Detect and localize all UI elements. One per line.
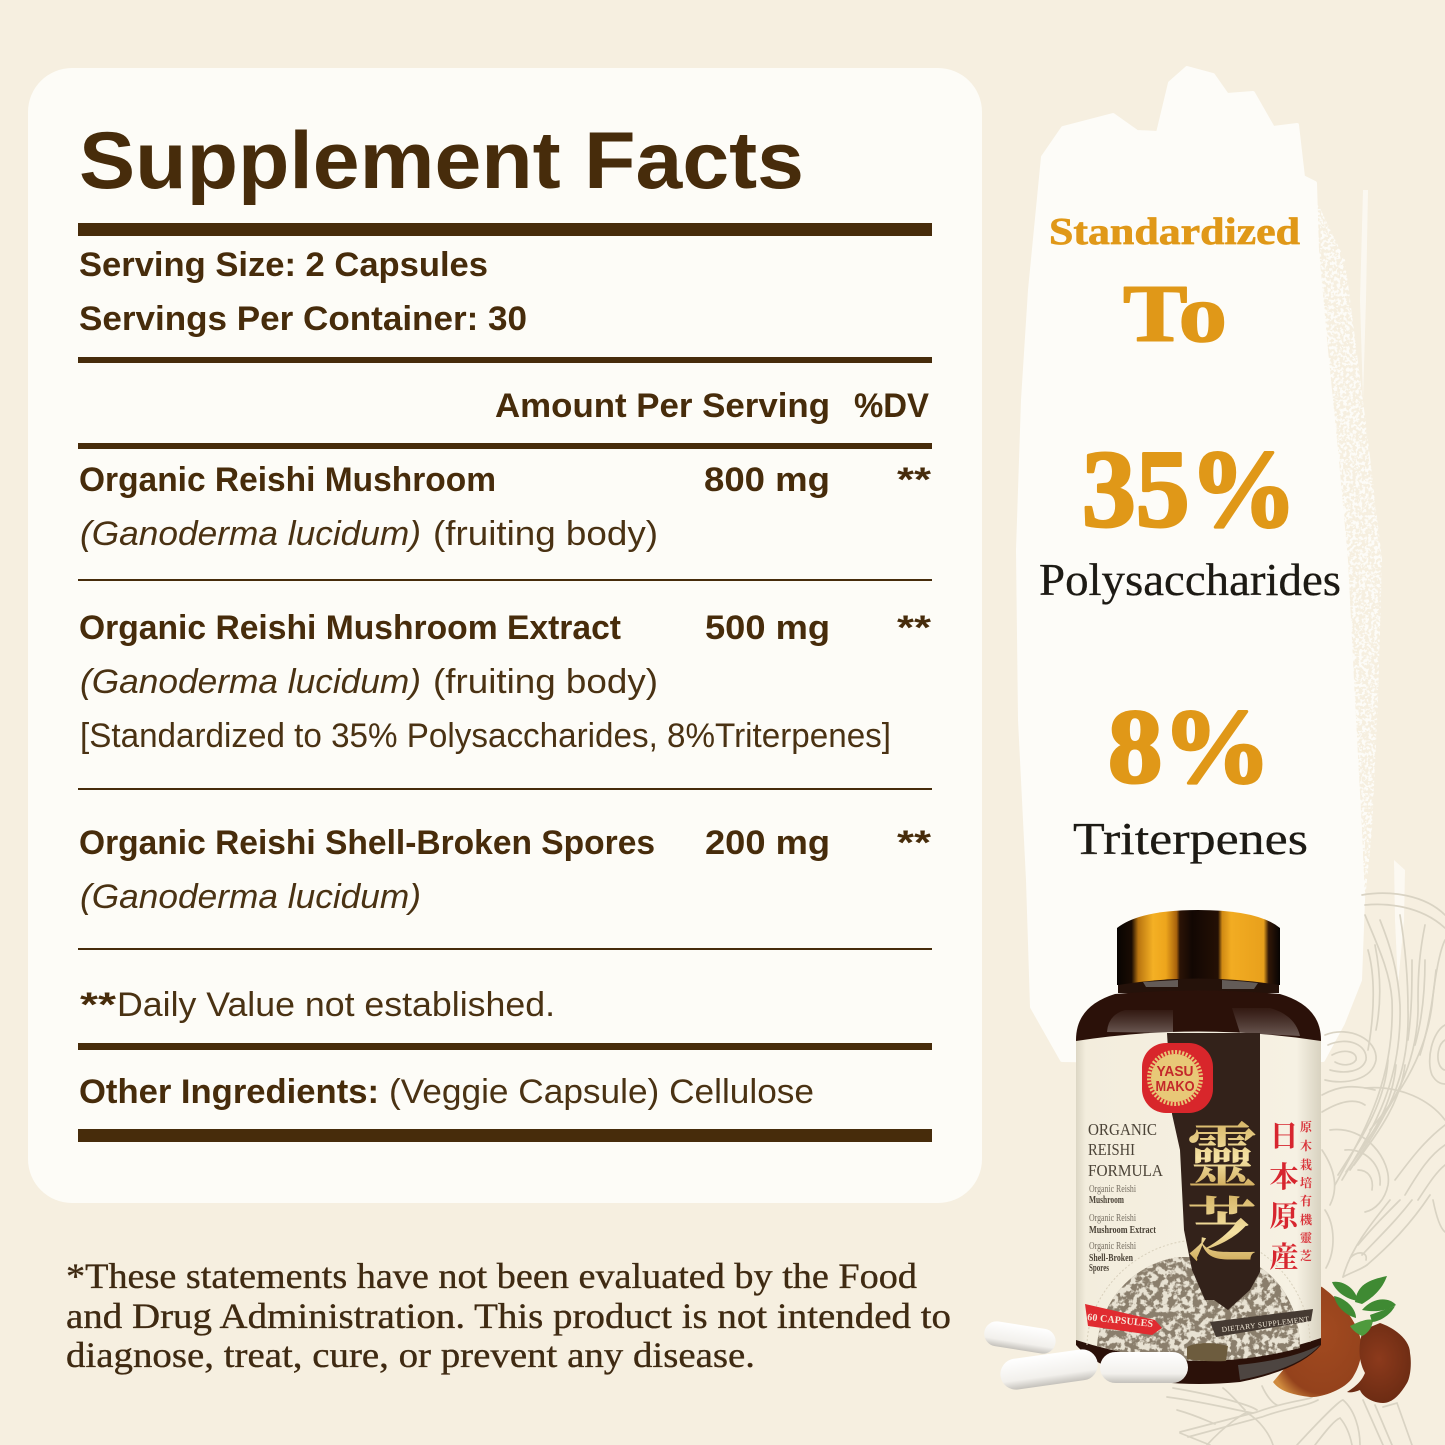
logo: YASU: [1156, 1063, 1194, 1080]
daily value note: **: [80, 986, 117, 1024]
label ingredient list: Spores: [1089, 1263, 1109, 1274]
leaf: [1332, 1276, 1396, 1336]
ingredient row 2: (Ganoderma lucidum): [80, 663, 421, 701]
daily value note: Daily Value not established.: [117, 986, 555, 1024]
capsule back: [982, 1320, 1057, 1355]
FDA disclaimer: *These statements have not been evaluated by the Food: [66, 1256, 917, 1296]
bottle shoulder highlights: [1107, 1008, 1320, 1380]
ingredient row 2: [Standardized to 35% Polysaccharides, 8%Triterpenes]: [80, 717, 891, 755]
capsule right: [1100, 1352, 1188, 1383]
stat: 35% polysaccharides: 35%: [1082, 428, 1297, 550]
logo: [1142, 1043, 1213, 1113]
label product name: [1088, 1120, 1164, 1180]
ingredient row 2: **: [897, 609, 932, 647]
capsules: [982, 1320, 1188, 1392]
capsule left: [998, 1347, 1100, 1392]
other ingredients: [79, 1073, 814, 1111]
stat: 35% polysaccharides: Polysaccharides: [1039, 554, 1341, 605]
reishi mushrooms and leaf: [1273, 1276, 1411, 1403]
label mushroom artwork: [1097, 1257, 1300, 1361]
red vertical text: [1300, 1119, 1313, 1263]
60 capsules tag: 60 CAPSULES: [1087, 1312, 1154, 1330]
gold reishi characters: 靈: [1187, 1120, 1257, 1197]
red vertical text: 有: [1300, 1193, 1312, 1208]
ingredient row 1: [79, 461, 932, 553]
label product name: FORMULA: [1088, 1161, 1164, 1180]
red vertical text: 培: [1300, 1175, 1312, 1190]
red vertical text: 芝: [1300, 1248, 1312, 1263]
ingredient row 2: 500 mg: [705, 609, 830, 647]
red vertical text: 機: [1300, 1212, 1313, 1227]
red japanese origin text: 本: [1269, 1161, 1299, 1194]
gold reishi characters: 芝: [1187, 1194, 1257, 1271]
ingredient row 3: **: [897, 824, 932, 862]
red vertical text: 靈: [1300, 1230, 1312, 1245]
ingredient row 2: (fruiting body): [433, 663, 658, 701]
label ingredient list: Mushroom Extract: [1089, 1225, 1157, 1236]
red vertical text: 原: [1300, 1119, 1313, 1134]
red japanese origin text: [1269, 1121, 1300, 1274]
label ingredient list: Organic Reishi: [1089, 1184, 1136, 1195]
60 capsules tag: [1085, 1304, 1162, 1335]
FDA disclaimer: diagnose, treat, cure, or prevent any disease.: [66, 1335, 755, 1375]
other ingredients: Other Ingredients:: [79, 1073, 379, 1111]
logo: MAKO: [1156, 1078, 1195, 1095]
gold reishi characters: [1187, 1120, 1257, 1271]
red japanese origin text: 日: [1269, 1121, 1299, 1153]
serving info: Servings Per Container: 30: [79, 300, 527, 338]
mushroom line art background: [1167, 893, 1445, 1445]
brush stroke panel: [1018, 68, 1405, 1062]
ingredient row 3: 200 mg: [705, 824, 830, 862]
serving info: Serving Size: 2 Capsules: [79, 246, 488, 284]
ingredient row 1: Organic Reishi Mushroom: [79, 461, 496, 499]
standardized heading: Standardized: [1049, 211, 1300, 253]
red vertical text: 栽: [1300, 1157, 1312, 1172]
ingredient row 1: 800 mg: [704, 461, 830, 499]
label dark brush strip: [1167, 1033, 1260, 1310]
bottle label: [1076, 1032, 1321, 1361]
product bottle: [1076, 910, 1321, 1384]
table header: %DV: [854, 387, 929, 425]
label ingredient list: Mushroom: [1089, 1195, 1124, 1206]
ingredient row 2: [79, 609, 932, 755]
ingredient row 2: Organic Reishi Mushroom Extract: [79, 609, 621, 647]
red vertical text: 木: [1300, 1138, 1312, 1153]
label product name: ORGANIC: [1088, 1120, 1157, 1139]
table header: Amount Per Serving: [495, 387, 830, 425]
bottle body: [1076, 990, 1321, 1384]
stat: 8% triterpenes: 8%: [1108, 688, 1271, 805]
ingredient row 3: Organic Reishi Shell-Broken Spores: [79, 824, 655, 862]
label product name: REISHI: [1088, 1140, 1135, 1159]
ingredient row 3: (Ganoderma lucidum): [80, 878, 421, 916]
ingredient row 1: (Ganoderma lucidum): [80, 515, 421, 553]
ingredient row 3: [79, 824, 932, 916]
ingredient row 1: **: [897, 461, 932, 499]
supplement facts card: [28, 68, 982, 1203]
stat: 8% triterpenes: Triterpenes: [1073, 813, 1308, 864]
stat: 35% polysaccharides: [1039, 428, 1341, 605]
label rings: [1087, 1238, 1310, 1345]
label ingredient list: Shell-Broken: [1089, 1253, 1133, 1264]
title: Supplement Facts: [79, 116, 804, 206]
other ingredients: (Veggie Capsule) Cellulose: [389, 1073, 814, 1111]
FDA disclaimer: [66, 1256, 951, 1375]
label ingredient list: [1089, 1184, 1157, 1274]
FDA disclaimer: and Drug Administration. This product is not intended to: [66, 1296, 951, 1336]
dietary supplement tag: [1210, 1309, 1313, 1337]
standardized heading: To: [1123, 268, 1227, 359]
standardized heading: [1049, 211, 1300, 359]
serving info: [79, 246, 527, 338]
ingredient row 1: (fruiting body): [433, 515, 658, 553]
red japanese origin text: 産: [1269, 1241, 1299, 1274]
bottle cap: [1117, 910, 1280, 993]
dietary supplement tag: DIETARY SUPPLEMENT: [1221, 1314, 1310, 1334]
red japanese origin text: 原: [1269, 1200, 1300, 1233]
stat: 8% triterpenes: [1073, 688, 1308, 864]
label ingredient list: Organic Reishi: [1089, 1241, 1136, 1252]
label ingredient list: Organic Reishi: [1089, 1213, 1136, 1224]
